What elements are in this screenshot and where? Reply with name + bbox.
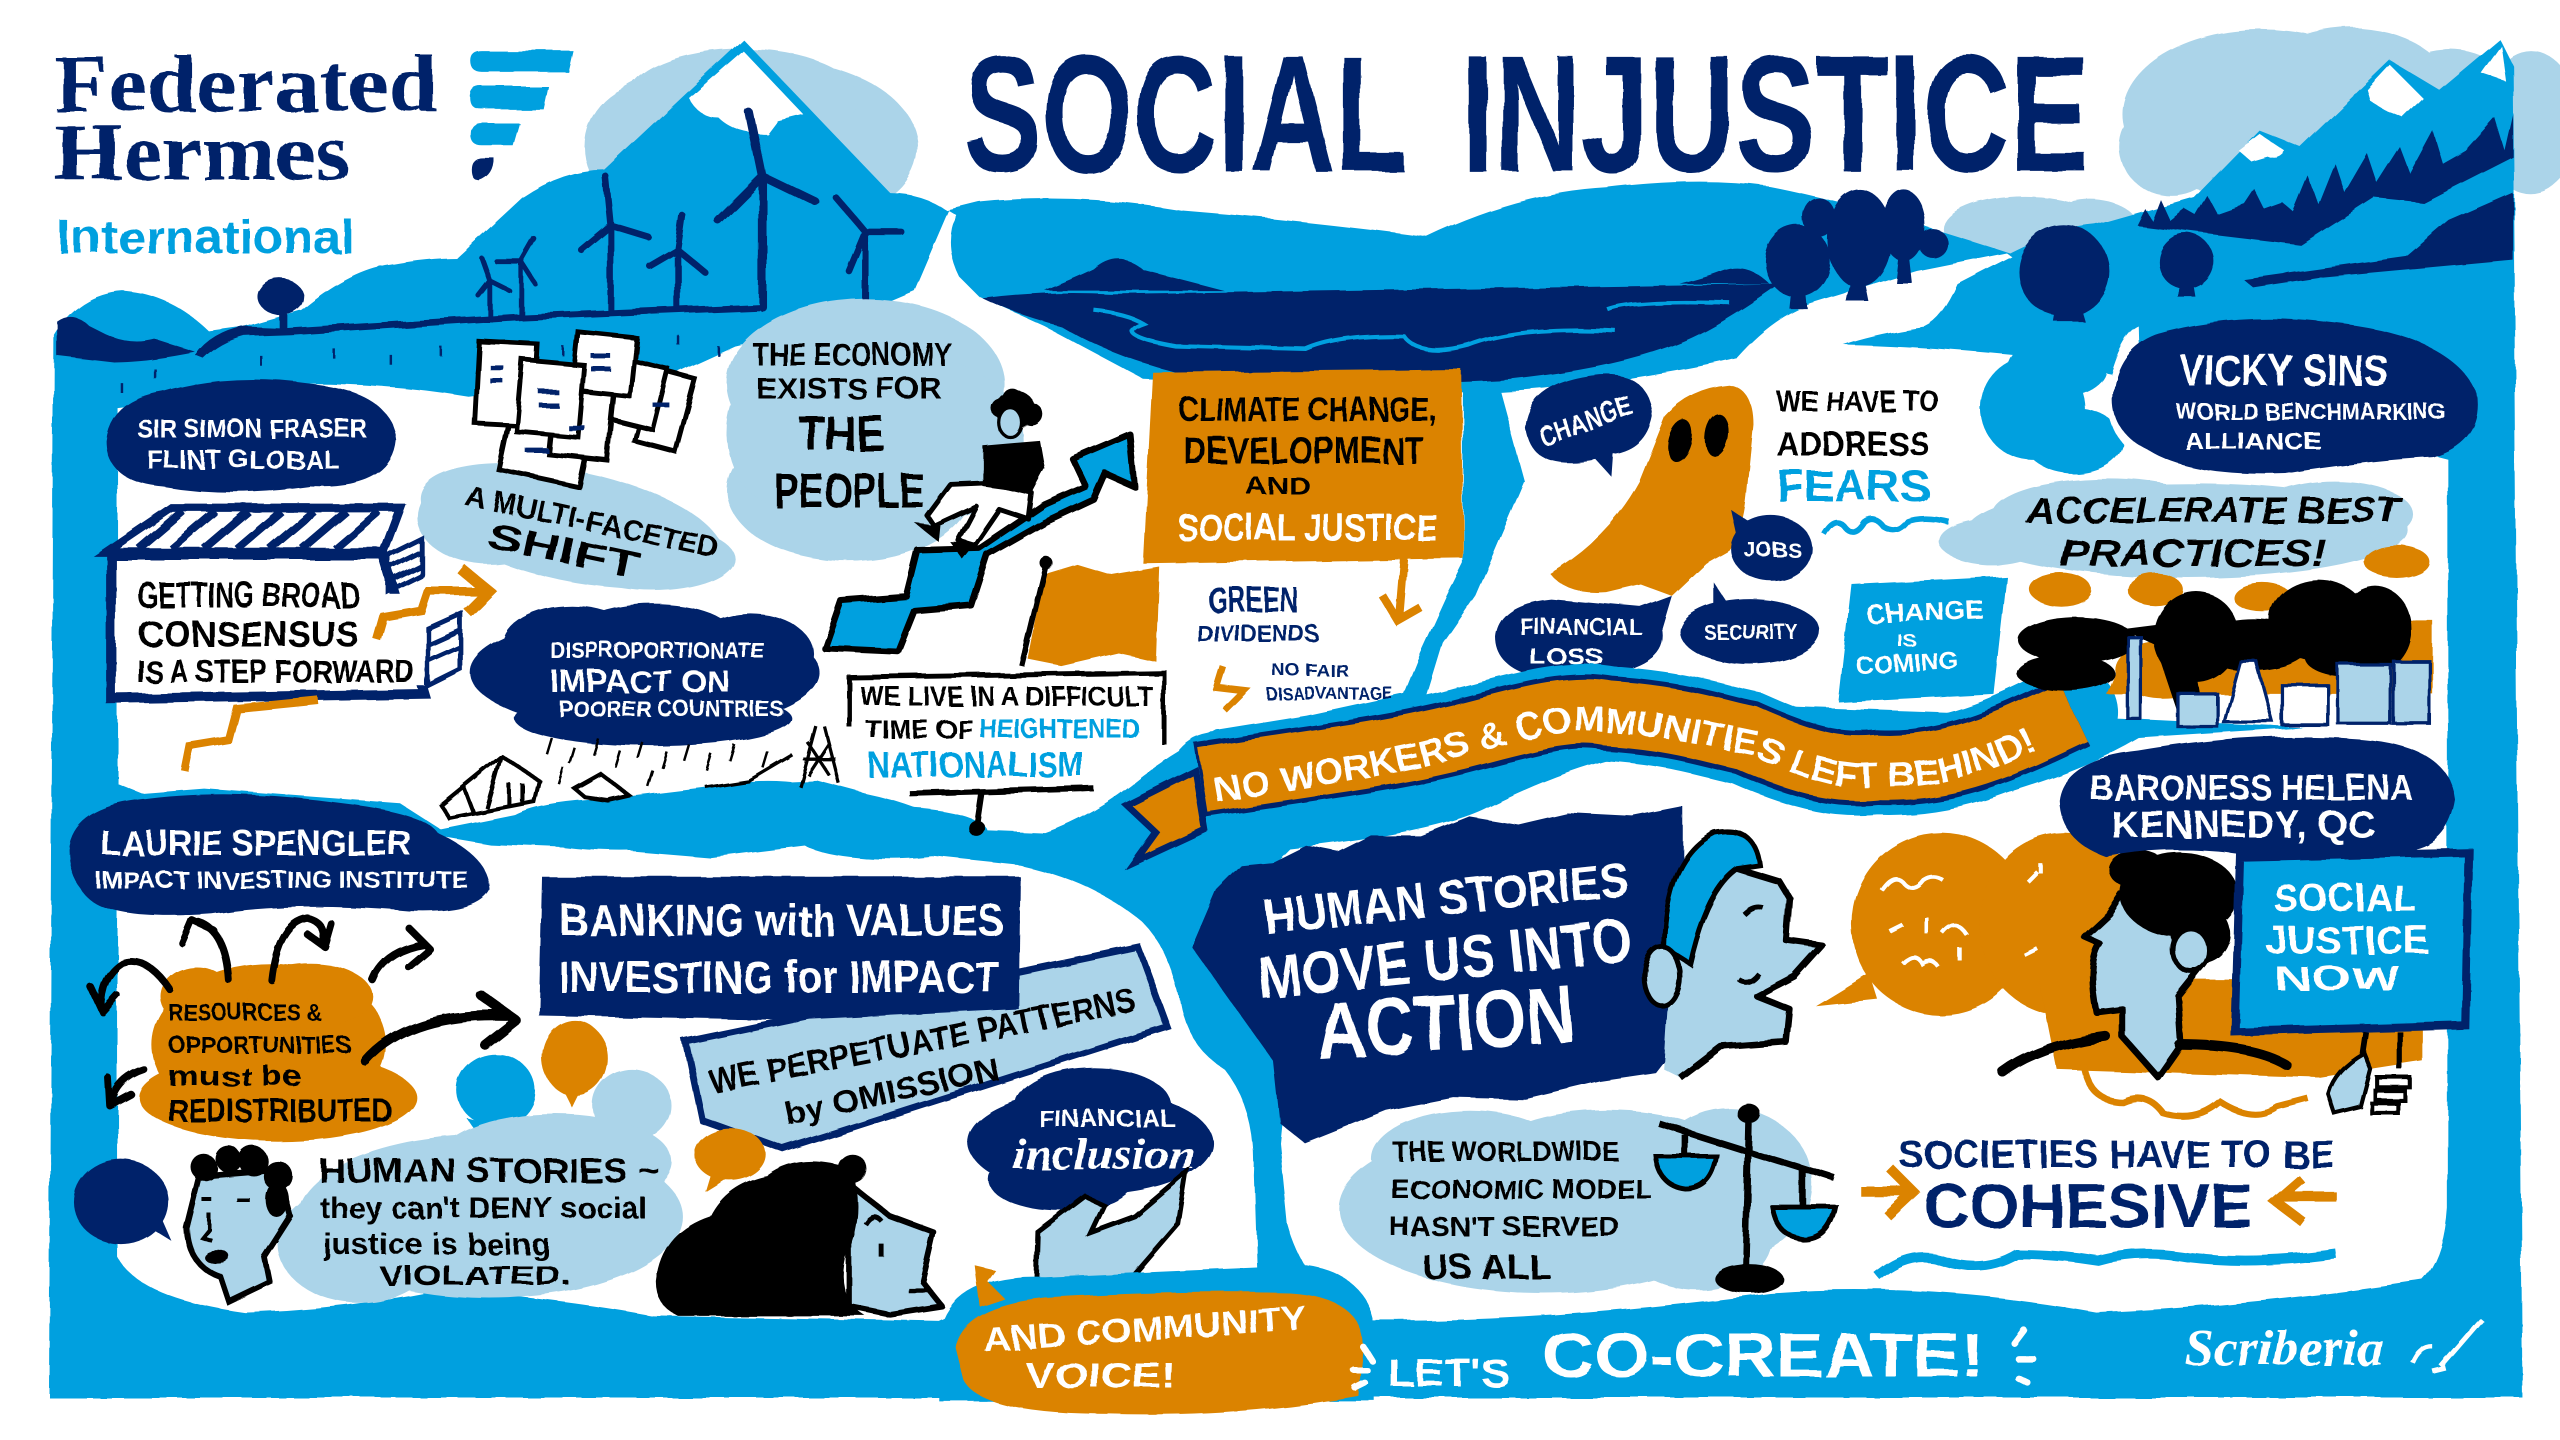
- cloud: the economy exists for the people: PEOPLE: [774, 465, 924, 519]
- speech bubble: change: CHANGE: [1534, 389, 1637, 454]
- blob: resources must be redistributed: RESOURCES &: [168, 999, 322, 1026]
- text box: getting broad consensus: [106, 508, 460, 699]
- box: change is coming: IS: [1897, 631, 1917, 651]
- white region: lower right: [1208, 718, 2447, 1321]
- callout: and community voice: [939, 1265, 1375, 1414]
- banner: no workers and communities left behind: NO WORKERS & COMMUNITIES LEFT BEHIND!: [1214, 706, 2035, 802]
- orange background behind protester: [2039, 980, 2423, 1078]
- callout: disproportionate impact: DISPROPORTIONATE: [550, 637, 764, 663]
- callout: Vicky Sins: VICKY SINS: [2180, 346, 2389, 395]
- climate change box: SOCIAL JUSTICE: [1177, 506, 1437, 549]
- icon: scales of justice: [1656, 1104, 1835, 1293]
- cloud: accelerate best practices: PRACTICES!: [2060, 533, 2327, 576]
- text: green dividends: [1197, 579, 1393, 710]
- callout: financial inclusion with hand: inclusion: [1012, 1128, 1195, 1179]
- banner: no workers and communities left behind: [1121, 663, 2114, 870]
- text: we have to address fears: ADDRESS: [1776, 426, 1930, 464]
- blob: resources must be redistributed: [139, 963, 416, 1141]
- speech bubble: jobs: JOBS: [1744, 539, 1801, 562]
- cloud: human stories text: they can't DENY social: [320, 1192, 647, 1225]
- wind turbines: [478, 113, 901, 317]
- climate change box: [1143, 369, 1463, 563]
- blob: resources must be redistributed: REDISTRIBUTED: [168, 1092, 392, 1129]
- arrow: orange steps: [184, 570, 488, 771]
- white region: right centre: [1420, 253, 2447, 735]
- climate change box: CLIMATE CHANGE,: [1179, 391, 1437, 429]
- title: INJUSTICE: [1461, 21, 2090, 207]
- callout: Vicky Sins: [2106, 319, 2478, 474]
- cloud: the economy exists for the people: EXISTS FOR: [756, 372, 942, 405]
- text: we have to address fears: [1776, 385, 1949, 534]
- title: SOCIAL: [963, 21, 1407, 207]
- sign: heightened nationalism: TIME OF: [865, 714, 973, 744]
- logo: Federated: [54, 38, 438, 129]
- text: societies have to be cohesive: SOCIETIES HAVE TO BE: [1899, 1133, 2335, 1176]
- callout: Baroness Helena Kennedy: BARONESS HELENA: [2090, 767, 2413, 808]
- blob: resources must be redistributed: must be: [168, 1061, 302, 1092]
- cloud: the worldwide economic model: HASN'T SERVED: [1389, 1211, 1620, 1242]
- box: we perpetuate patterns by omission: WE PERPETUATE PATTERNS: [706, 982, 1140, 1102]
- cloud: the economy exists for the people: THE: [798, 408, 885, 462]
- flood cloud in blue band: [506, 780, 988, 859]
- blob: resources must be redistributed: OPPORTUNITIES: [168, 1032, 351, 1059]
- text: let's co-create: [1353, 1321, 2033, 1395]
- cloud: the worldwide economic model: US ALL: [1422, 1248, 1551, 1286]
- text box: getting broad consensus: IS A STEP FORWARD: [137, 652, 415, 689]
- climate change box: DEVELOPMENT: [1184, 430, 1424, 472]
- text: green dividends: DISADVANTAGE: [1265, 683, 1393, 703]
- cloud: the economy exists for the people: [727, 299, 1024, 562]
- text box: getting broad consensus: GETTING BROAD: [137, 574, 359, 615]
- right landscape: mountains and trees: [2018, 46, 2513, 322]
- text: let's co-create: LET'S: [1388, 1352, 1510, 1395]
- callout: Laurie Spengler: LAURIE SPENGLER: [101, 823, 411, 864]
- sign: social justice now: SOCIAL: [2273, 877, 2416, 920]
- box: we perpetuate patterns by omission: by OMISSION: [781, 1050, 1002, 1132]
- cloud: the worldwide economic model: [1339, 1109, 1812, 1293]
- box: banking with values: BANKING with VALUES: [560, 897, 1004, 946]
- logo: [54, 38, 573, 264]
- sign: social justice now: [2235, 852, 2469, 1113]
- callout: financial inclusion with hand: FINANCIAL: [1038, 1106, 1176, 1133]
- callout: and community voice: VOICE!: [1025, 1355, 1176, 1396]
- grass ticks: [122, 335, 718, 393]
- callout: financial inclusion with hand: [968, 1068, 1213, 1285]
- text: let's co-create: CO-CREATE!: [1543, 1321, 1984, 1390]
- callout: Baroness Helena Kennedy: KENNEDY, QC: [2111, 804, 2376, 846]
- sign: social justice now: JUSTICE: [2266, 919, 2429, 962]
- signature: Scriberia: [2184, 1319, 2482, 1377]
- clouds: behind right mountains: [1943, 28, 2560, 261]
- icon: protester with sign: [2003, 851, 2286, 1078]
- callout: Sir Simon Fraser: FLINT GLOBAL: [147, 445, 340, 475]
- callout: disproportionate impact: IMPACT ON: [550, 664, 730, 699]
- cloud: behind left mountain: [584, 49, 918, 220]
- icon: orange flag on pole: [1022, 557, 1159, 666]
- callout: Sir Simon Fraser: [106, 379, 397, 492]
- callout: Baroness Helena Kennedy: [2059, 736, 2456, 865]
- cloud: human stories text: VIOLATED.: [379, 1260, 571, 1291]
- climate change box: AND: [1246, 474, 1311, 501]
- text box: getting broad consensus: CONSENSUS: [139, 614, 359, 655]
- arrow: down from box: [1383, 558, 1420, 620]
- speech bubble: financial loss: LOSS: [1530, 643, 1603, 669]
- text: societies have to be cohesive: [1861, 1133, 2336, 1277]
- lake hills: lake and trees: [983, 189, 1948, 383]
- orange squiggle below protester: [2083, 1064, 2309, 1117]
- callout: disproportionate impact: [470, 604, 820, 746]
- speech bubble: change: [1525, 374, 1652, 477]
- text: we have to address fears: WE HAVE TO: [1776, 385, 1940, 418]
- callout: human stories move us into action: ACTION: [1314, 969, 1578, 1078]
- cloud: a multi-faceted shift: SHIFT: [483, 514, 644, 587]
- sign: heightened nationalism: HEIGHTENED: [980, 713, 1140, 744]
- text: green dividends: GREEN: [1208, 579, 1298, 620]
- mountain snow cap: [689, 51, 803, 134]
- text: we have to address fears: FEARS: [1776, 462, 1930, 511]
- speech bubble: financial loss: FINANCIAL: [1520, 614, 1642, 641]
- left hills and ground: [57, 279, 759, 362]
- logo: International: [57, 211, 354, 264]
- callout: human stories move us into action: MOVE US INTO: [1255, 905, 1635, 1012]
- factory with smoke: [2016, 545, 2433, 727]
- cloud: the economy exists for the people: THE ECONOMY: [753, 336, 952, 373]
- callout: human stories move us into action: HUMAN STORIES: [1261, 853, 1632, 945]
- cloud: accelerate best practices: ACCELERATE BEST: [2025, 489, 2403, 530]
- icon: ghost: [1549, 385, 1753, 596]
- cloud: human stories text: justice is being: [322, 1228, 550, 1261]
- arrows: radiating from blob: [91, 918, 516, 1105]
- icon: stack of papers: [475, 332, 695, 486]
- speech bubble: security: [1680, 583, 1820, 664]
- icon: woman's profile: [656, 1154, 942, 1316]
- callout: disproportionate impact: POORER COUNTRIES: [558, 696, 784, 722]
- box: we perpetuate patterns by omission: [686, 947, 1167, 1149]
- text: green dividends: DIVIDENDS: [1197, 621, 1319, 648]
- box: banking with values: [539, 877, 1020, 1020]
- signature: Scriberia: Scriberia: [2184, 1319, 2384, 1377]
- sign: heightened nationalism: [849, 673, 1164, 836]
- box: change is coming: [1838, 576, 2007, 702]
- box: change is coming: CHANGE: [1865, 594, 1984, 630]
- cloud: the worldwide economic model: THE WORLDWIDE: [1393, 1136, 1620, 1167]
- cloud: accelerate best practices: [1940, 478, 2413, 578]
- cloud: human stories text: HUMAN STORIES ~: [318, 1152, 660, 1190]
- logo: Hermes: [54, 107, 349, 198]
- speech bubble: security: SECURITY: [1703, 620, 1798, 643]
- sign: heightened nationalism: WE LIVE IN A DIFFICULT: [860, 680, 1153, 711]
- callout: and community voice: AND COMMUNITY: [982, 1299, 1308, 1360]
- speech bubble: jobs: [1731, 509, 1812, 581]
- icon: rising blue arrow with person: [824, 389, 1135, 651]
- cloud: a multi-faceted shift: A MULTI-FACETED: [462, 479, 721, 565]
- callout: Vicky Sins: ALLIANCE: [2184, 428, 2322, 454]
- text: green dividends: NO FAIR: [1272, 660, 1349, 680]
- box: change is coming: COMING: [1855, 648, 1959, 680]
- blue scalloped cloud behind callout: [1980, 338, 2122, 473]
- callout: human stories move us into action: [1192, 807, 1683, 1143]
- box: banking with values: INVESTING for IMPACT: [558, 954, 999, 1003]
- title: [963, 21, 2090, 207]
- callout: Laurie Spengler: [69, 794, 490, 916]
- cloud: human stories text: [278, 1113, 682, 1303]
- text: societies have to be cohesive: COHESIVE: [1923, 1173, 2253, 1242]
- white region: upper left and centre: [118, 211, 1463, 833]
- callout: Vicky Sins: WORLD BENCHMARKING: [2176, 399, 2446, 425]
- icon: man's face: [186, 1146, 292, 1301]
- speech bubble: orange scribbles: [1816, 833, 2149, 1016]
- speech bubbles: [73, 1020, 766, 1244]
- icon: speaking man: [1644, 831, 1822, 1078]
- callout: Laurie Spengler: IMPACT INVESTING INSTITUTE: [95, 867, 469, 894]
- speech bubble: financial loss: [1496, 596, 1672, 679]
- sign: heightened nationalism: NATIONALISM: [867, 744, 1084, 785]
- cloud: the worldwide economic model: ECONOMIC MODEL: [1391, 1173, 1652, 1204]
- callout: Sir Simon Fraser: SIR SIMON FRASER: [137, 414, 367, 444]
- icon: houses, rain and pylon: [441, 727, 839, 818]
- white region: lower left: [118, 816, 1257, 1321]
- sign: social justice now: NOW: [2274, 959, 2400, 996]
- cloud: a multi-faceted shift: [408, 439, 735, 612]
